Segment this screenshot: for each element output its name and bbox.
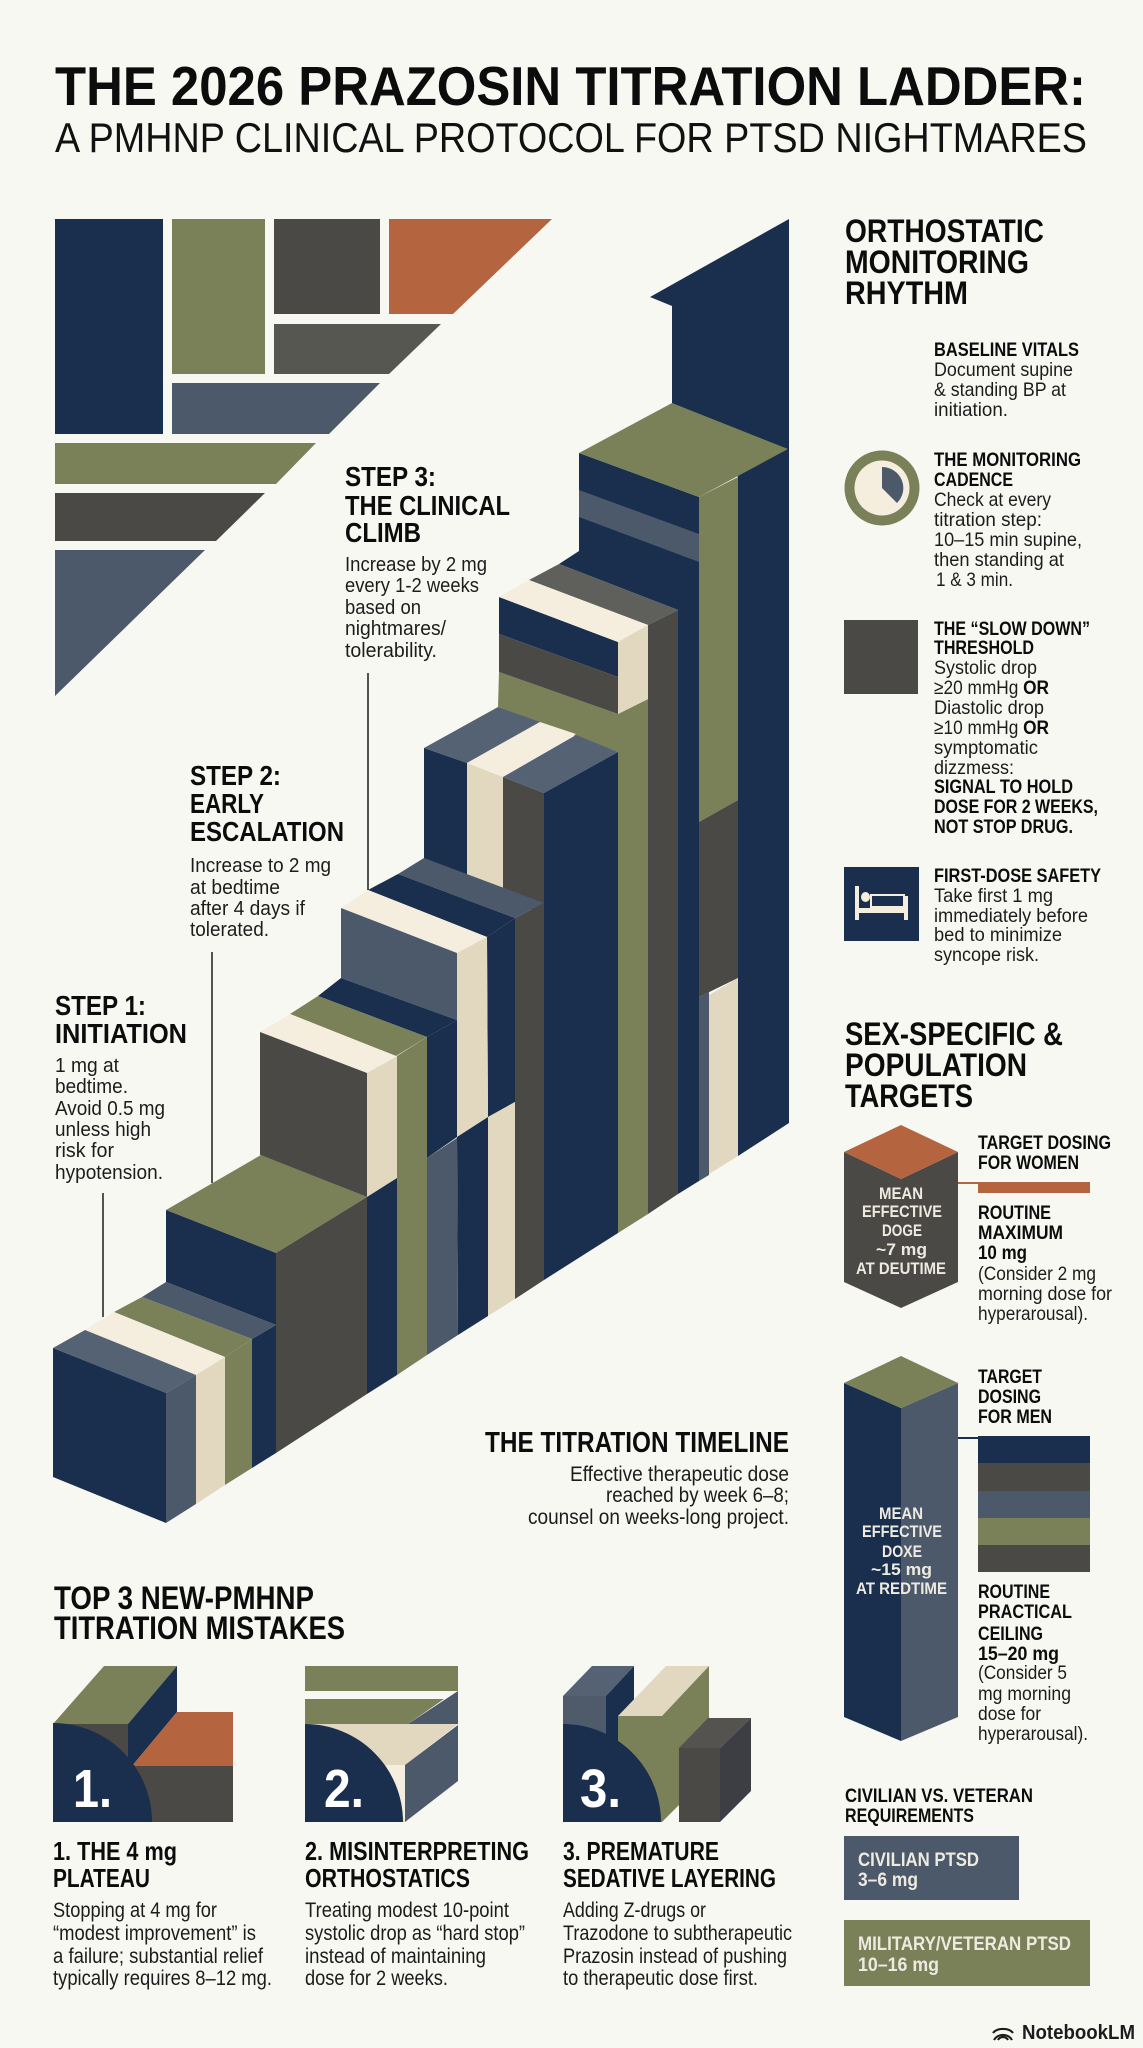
text: first-dose safety: immediately before: [934, 905, 1088, 927]
text: target dosing for women: [978, 1133, 1113, 1325]
text: target dosing for men: CEILING: [978, 1624, 1043, 1645]
chart: women hexagon block: ~7 mg: [876, 1240, 927, 1259]
text block: the titration timeline: Effective therapeutic dose: [570, 1463, 789, 1486]
text: slow down threshold: ≥10 mmHg OR: [934, 717, 1049, 739]
text block: step 1: [55, 990, 187, 1184]
text: mistake 1: PLATEAU: [53, 1863, 150, 1893]
text: mistake 1: typically requires 8–12 mg.: [53, 1967, 272, 1990]
icon: mistake 2 blocks: [305, 1666, 458, 1822]
text: monitoring cadence: 10–15 min supine,: [934, 529, 1082, 551]
panel: mistake 2: [305, 1666, 529, 1990]
chart: women hexagon block: [844, 1125, 958, 1308]
text block: step 2: STEP 2:: [190, 760, 281, 791]
text: slow down threshold: THE “SLOW DOWN”: [934, 618, 1090, 640]
icon: mistake 2 blocks: 2.: [324, 1759, 364, 1819]
text: slow down threshold: Systolic drop: [934, 657, 1037, 679]
heading: orthostatic monitoring rhythm: MONITORING: [845, 244, 1029, 280]
text: baseline vitals: [934, 339, 1079, 421]
text block: step 3: THE CLINICAL: [345, 490, 510, 521]
text block: step 3: CLIMB: [345, 517, 421, 548]
isometric titration staircase chart: [53, 219, 789, 1523]
text: target dosing for women: FOR WOMEN: [978, 1153, 1079, 1174]
text: target dosing for women: MAXIMUM: [978, 1223, 1063, 1244]
text: target dosing for men: dose for: [978, 1704, 1042, 1725]
chart: men prism block: MEAN: [879, 1504, 923, 1523]
text: first-dose safety: FIRST-DOSE SAFETY: [934, 865, 1101, 887]
text block: step 2: at bedtime: [190, 877, 280, 899]
text: mistake 2: systolic drop as “hard stop”: [305, 1922, 525, 1945]
heading: sex-specific and population targets: [845, 1016, 1063, 1114]
title: [55, 55, 1087, 161]
text: monitoring cadence: 1 & 3 min.: [936, 569, 1013, 591]
text: mistake 2: instead of maintaining: [305, 1945, 486, 1968]
icon: mistake 1 blocks: 1.: [73, 1759, 112, 1819]
icon: mistake 1 blocks: [53, 1666, 233, 1822]
text: monitoring cadence: [934, 449, 1082, 591]
text: target dosing for women: (Consider 2 mg: [978, 1264, 1096, 1285]
heading: sex-specific and population targets: TARGETS: [845, 1078, 973, 1114]
icon: monitoring clock: [844, 450, 920, 526]
text: slow down threshold: THRESHOLD: [934, 637, 1034, 659]
text: target dosing for men: [978, 1367, 1088, 1745]
heading: sex-specific and population targets: POPULATION: [845, 1047, 1027, 1083]
icon: mistake 3 blocks: 3.: [580, 1759, 621, 1819]
text: mistake 3: 3. PREMATURE: [563, 1836, 719, 1866]
heading: civilian vs veteran requirements: REQUIREMENTS: [845, 1806, 974, 1827]
decorative geometric tangram panel: [55, 219, 552, 696]
text block: step 1: STEP 1:: [55, 990, 146, 1021]
bar: civilian PTSD: CIVILIAN PTSD: [858, 1850, 979, 1871]
text: first-dose safety: bed to minimize: [934, 924, 1062, 946]
text: mistake 2: dose for 2 weeks.: [305, 1967, 448, 1990]
text: slow down threshold: DOSE FOR 2 WEEKS,: [934, 796, 1098, 818]
text: target dosing for men: hyperarousal).: [978, 1724, 1088, 1745]
text: mistake 3: Trazodone to subtherapeutic: [563, 1922, 792, 1945]
text: monitoring cadence: Check at every: [934, 489, 1051, 511]
connector and bar: women: [958, 1182, 1090, 1193]
text: slow down threshold: SIGNAL TO HOLD: [934, 776, 1073, 798]
panel: mistake 3: [563, 1666, 792, 1990]
text block: the titration timeline: counsel on weeks-long project.: [528, 1506, 789, 1529]
text: target dosing for men: PRACTICAL: [978, 1602, 1072, 1623]
text: baseline vitals: Document supine: [934, 359, 1073, 381]
text: target dosing for women: ROUTINE: [978, 1203, 1051, 1224]
chart: women hexagon block: MEAN: [879, 1184, 923, 1203]
text: mistake 1: [53, 1836, 272, 1990]
text: mistake 2: 2. MISINTERPRETING: [305, 1836, 529, 1866]
text: baseline vitals: initiation.: [934, 399, 1008, 421]
text block: step 1: hypotension.: [55, 1162, 163, 1184]
text: slow down threshold: [934, 618, 1098, 838]
icon: mistake 3 blocks: [563, 1666, 751, 1822]
text block: step 3: based on: [345, 597, 421, 619]
text: slow down threshold: symptomatic: [934, 737, 1038, 759]
title: THE 2026 PRAZOSIN TITRATION LADDER:: [55, 55, 1086, 117]
text: mistake 1: 1. THE 4 mg: [53, 1836, 177, 1866]
text block: step 2: [190, 760, 344, 941]
text: first-dose safety: Take first 1 mg: [934, 885, 1053, 907]
text block: step 2: Increase to 2 mg: [190, 855, 331, 877]
heading: orthostatic monitoring rhythm: ORTHOSTATIC: [845, 213, 1044, 249]
bar: military/veteran PTSD: 10–16 mg: [858, 1955, 939, 1976]
text: target dosing for men: DOSING: [978, 1387, 1041, 1408]
heading: orthostatic monitoring rhythm: [845, 213, 1044, 311]
NotebookLM logo and wordmark: NotebookLM: [1022, 2022, 1135, 2044]
heading: top 3 mistakes: TOP 3 NEW-PMHNP: [54, 1580, 314, 1616]
text: monitoring cadence: then standing at: [934, 549, 1065, 571]
text block: step 3: STEP 3:: [345, 461, 436, 492]
chart: women hexagon block: EFFECTIVE: [862, 1202, 942, 1221]
chart: women hexagon block: AT DEUTIME: [856, 1259, 946, 1278]
text block: step 1: Avoid 0.5 mg: [55, 1098, 165, 1120]
chart: women hexagon block: DOGE: [882, 1221, 922, 1240]
leader line: step 3: [367, 673, 369, 890]
text block: step 1: risk for: [55, 1140, 114, 1162]
text block: the titration timeline: THE TITRATION TIMELINE: [485, 1427, 789, 1459]
panel: mistake 1: [53, 1666, 272, 1990]
text block: the titration timeline: [485, 1427, 789, 1529]
text block: step 1: unless high: [55, 1119, 151, 1141]
text: mistake 3: SEDATIVE LAYERING: [563, 1863, 776, 1893]
text block: step 2: tolerated.: [190, 919, 269, 941]
text: baseline vitals: & standing BP at: [934, 379, 1067, 401]
text: mistake 1: Stopping at 4 mg for: [53, 1899, 217, 1922]
text: target dosing for women: morning dose for: [978, 1284, 1113, 1305]
chart: men prism block: ~15 mg: [871, 1560, 932, 1579]
text: monitoring cadence: THE MONITORING: [934, 449, 1081, 471]
text: slow down threshold: ≥20 mmHg OR: [934, 677, 1049, 699]
text: mistake 2: [305, 1836, 529, 1990]
text block: step 2: after 4 days if: [190, 898, 305, 920]
bar: civilian PTSD: [844, 1836, 1019, 1900]
text block: step 1: 1 mg at: [55, 1055, 119, 1077]
text: slow down threshold: Diastolic drop: [934, 697, 1044, 719]
text: first-dose safety: [934, 865, 1101, 966]
chart: men prism block: DOXE: [882, 1542, 922, 1561]
heading: top 3 mistakes: [54, 1580, 345, 1646]
bar: military/veteran PTSD: MILITARY/VETERAN PTSD: [858, 1934, 1071, 1955]
text: target dosing for men: 15–20 mg: [978, 1644, 1059, 1665]
text: target dosing for men: TARGET: [978, 1367, 1042, 1388]
text: target dosing for men: ROUTINE: [978, 1582, 1050, 1603]
heading: sex-specific and population targets: SEX-SPECIFIC &: [845, 1016, 1063, 1052]
bar: military/veteran PTSD: [844, 1920, 1090, 1986]
heading: civilian vs veteran requirements: CIVILIAN VS. VETERAN: [845, 1786, 1033, 1807]
text block: the titration timeline: reached by week 6–8;: [606, 1484, 789, 1507]
text: target dosing for men: mg morning: [978, 1684, 1071, 1705]
text: mistake 1: “modest improvement” is: [53, 1922, 256, 1945]
text: target dosing for women: 10 mg: [978, 1243, 1027, 1264]
text: baseline vitals: BASELINE VITALS: [934, 339, 1079, 361]
text: mistake 2: ORTHOSTATICS: [305, 1863, 470, 1893]
text: target dosing for women: hyperarousal).: [978, 1304, 1088, 1325]
leader line: step 2: [211, 952, 213, 1183]
text: mistake 3: Prazosin instead of pushing: [563, 1945, 787, 1968]
heading: orthostatic monitoring rhythm: RHYTHM: [845, 275, 968, 311]
text block: step 3: every 1-2 weeks: [345, 575, 479, 597]
text: mistake 3: Adding Z-drugs or: [563, 1899, 706, 1922]
icon: slow down square: [844, 620, 918, 694]
text: target dosing for women: TARGET DOSING: [978, 1133, 1111, 1154]
leader line: step 1: [102, 1193, 104, 1317]
chart: men prism block: [844, 1356, 958, 1741]
text block: step 3: [345, 461, 510, 662]
text: target dosing for men: FOR MEN: [978, 1407, 1052, 1428]
text: slow down threshold: dizzmess:: [934, 757, 1014, 779]
chart: men prism block: AT REDTIME: [856, 1579, 947, 1598]
text: mistake 1: a failure; substantial relief: [53, 1945, 263, 1968]
connector and stripe swatch: men: [958, 1436, 1090, 1572]
text: mistake 3: [563, 1836, 792, 1990]
bar: civilian PTSD: 3–6 mg: [858, 1870, 918, 1891]
text block: step 3: tolerability.: [345, 640, 437, 662]
text: mistake 3: to therapeutic dose first.: [563, 1967, 758, 1990]
heading: civilian vs veteran requirements: [845, 1786, 1033, 1827]
heading: top 3 mistakes: TITRATION MISTAKES: [54, 1610, 345, 1646]
text block: step 3: Increase by 2 mg: [345, 554, 487, 576]
text block: step 2: EARLY: [190, 788, 264, 819]
text: target dosing for men: (Consider 5: [978, 1663, 1067, 1684]
icon: bed: [844, 867, 919, 941]
text: monitoring cadence: titration step:: [934, 509, 1042, 531]
text block: step 1: INITIATION: [55, 1018, 187, 1049]
text: mistake 2: Treating modest 10-point: [305, 1899, 509, 1922]
chart: men prism block: EFFECTIVE: [862, 1522, 942, 1541]
text block: step 3: nightmares/: [345, 618, 446, 640]
text: slow down threshold: NOT STOP DRUG.: [934, 816, 1073, 838]
text: first-dose safety: syncope risk.: [934, 944, 1039, 966]
text: monitoring cadence: CADENCE: [934, 469, 1013, 491]
text block: step 2: ESCALATION: [190, 816, 344, 847]
text block: step 1: bedtime.: [55, 1076, 128, 1098]
